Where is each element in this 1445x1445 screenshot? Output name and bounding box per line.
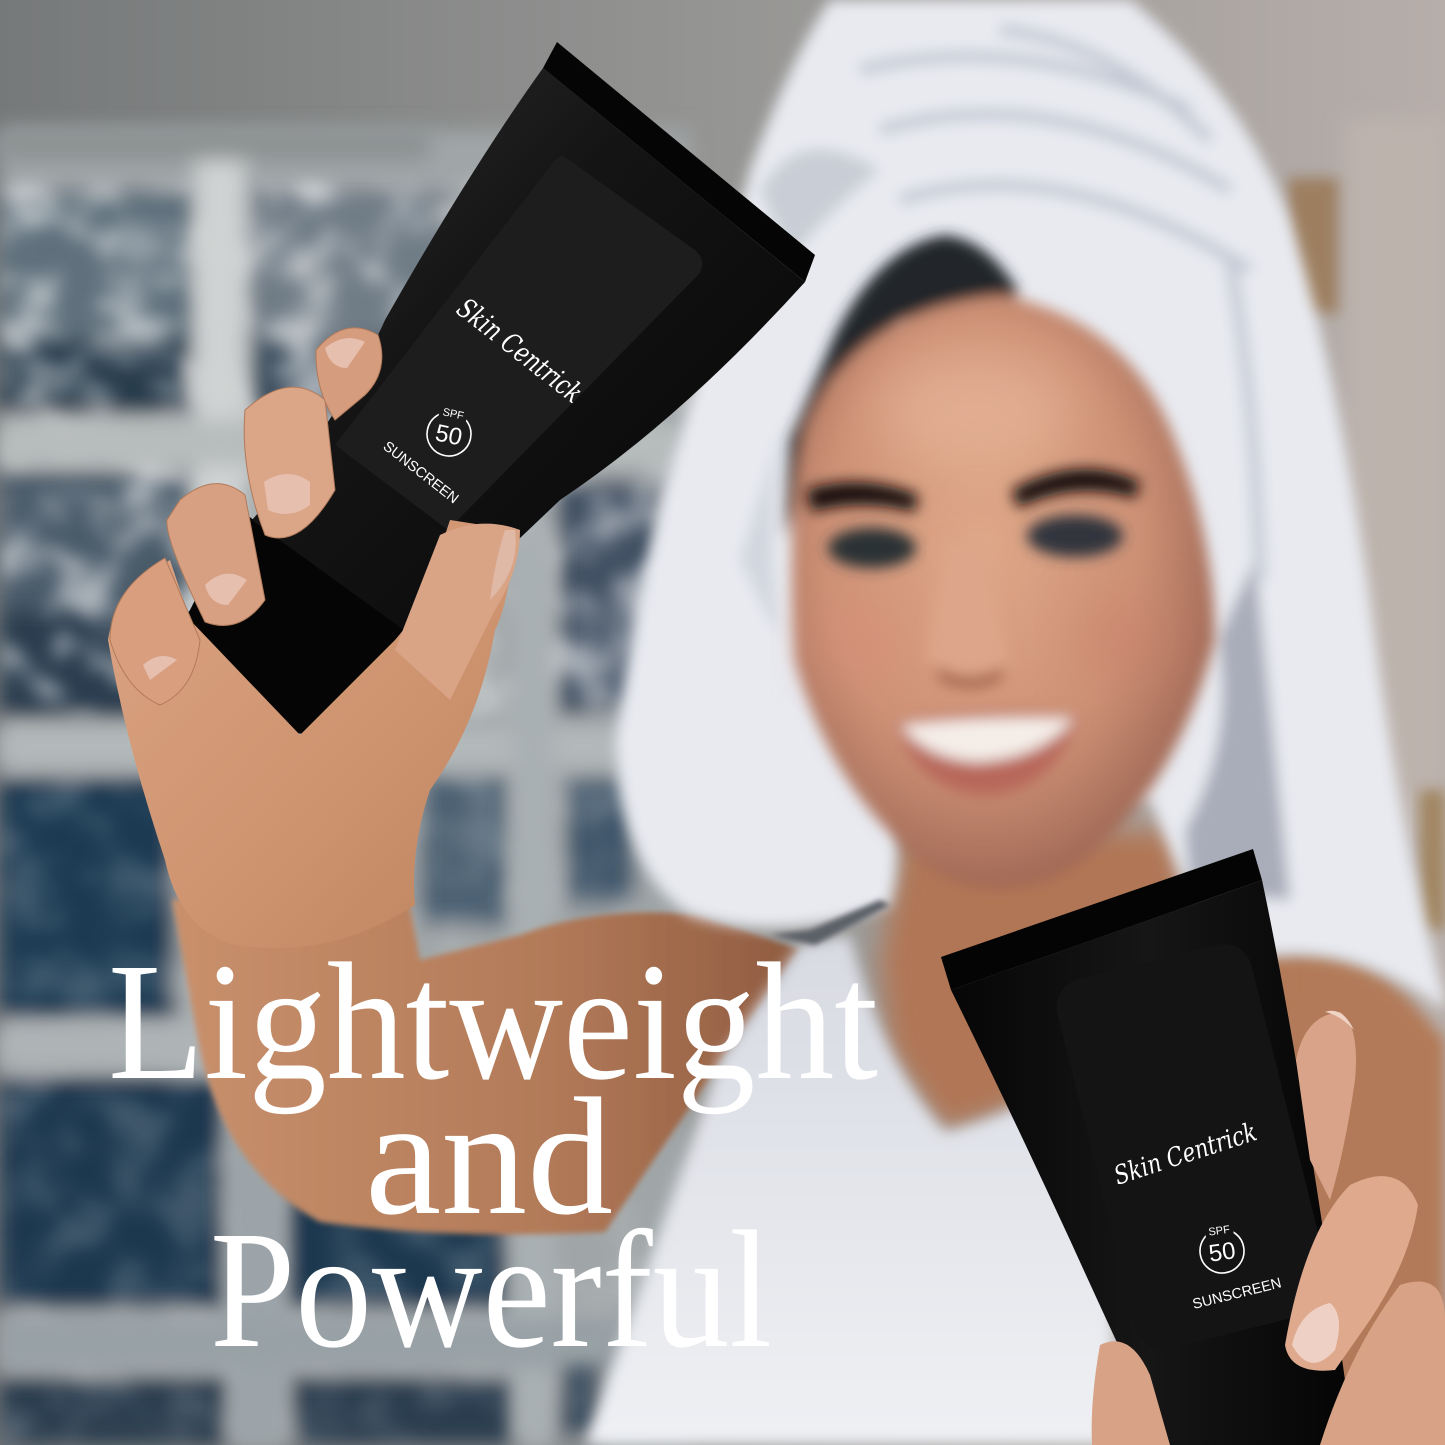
neck [880, 830, 1280, 1132]
tube two [941, 849, 1345, 1445]
towel [615, 0, 1445, 1010]
right cheek blush [1080, 595, 1170, 685]
face [785, 235, 1215, 889]
product name: SUNSCREEN [380, 439, 461, 507]
headline line one: Lightweight [108, 929, 878, 1115]
little finger [110, 558, 200, 705]
spf badge [423, 402, 476, 460]
window frames [0, 130, 680, 1445]
left cheek blush [815, 600, 905, 680]
palm [108, 520, 515, 948]
background frame right [1288, 178, 1338, 313]
fingers [1296, 1012, 1356, 1200]
headline line three: Powerful [210, 1197, 772, 1383]
tube label [1051, 938, 1337, 1355]
tube body [951, 880, 1345, 1445]
spf badge: SPF [1208, 1224, 1231, 1239]
tube body [252, 68, 805, 638]
forehead highlight [875, 350, 1075, 470]
nails [264, 474, 310, 514]
strap [770, 900, 890, 945]
nail [1292, 1303, 1339, 1363]
tube cap crimp [543, 42, 815, 282]
thumb [1092, 1341, 1170, 1445]
tube label [335, 155, 702, 530]
spf badge [1196, 1220, 1247, 1276]
arm [172, 880, 800, 1234]
spf badge: SPF [441, 406, 465, 423]
window glass speckle [0, 180, 690, 720]
headline [108, 929, 878, 1383]
thumb [395, 524, 520, 700]
hand two [1092, 1011, 1445, 1445]
tube cap crimp [941, 849, 1262, 990]
brand: Skin Centrick [1111, 1117, 1261, 1192]
window glass speckle lower [0, 770, 640, 1445]
product name: SUNSCREEN [1191, 1275, 1283, 1313]
white top [585, 935, 1120, 1445]
tube one [183, 42, 815, 734]
headline line two: and [365, 1064, 613, 1250]
hand one [108, 328, 520, 948]
spf badge: 50 [433, 419, 465, 451]
right shoulder [1250, 955, 1445, 1445]
background window [0, 130, 690, 1445]
fingers [167, 484, 265, 626]
brand: Skin Centrick [451, 291, 589, 410]
tube base [183, 510, 420, 734]
spf badge: 50 [1207, 1237, 1237, 1268]
